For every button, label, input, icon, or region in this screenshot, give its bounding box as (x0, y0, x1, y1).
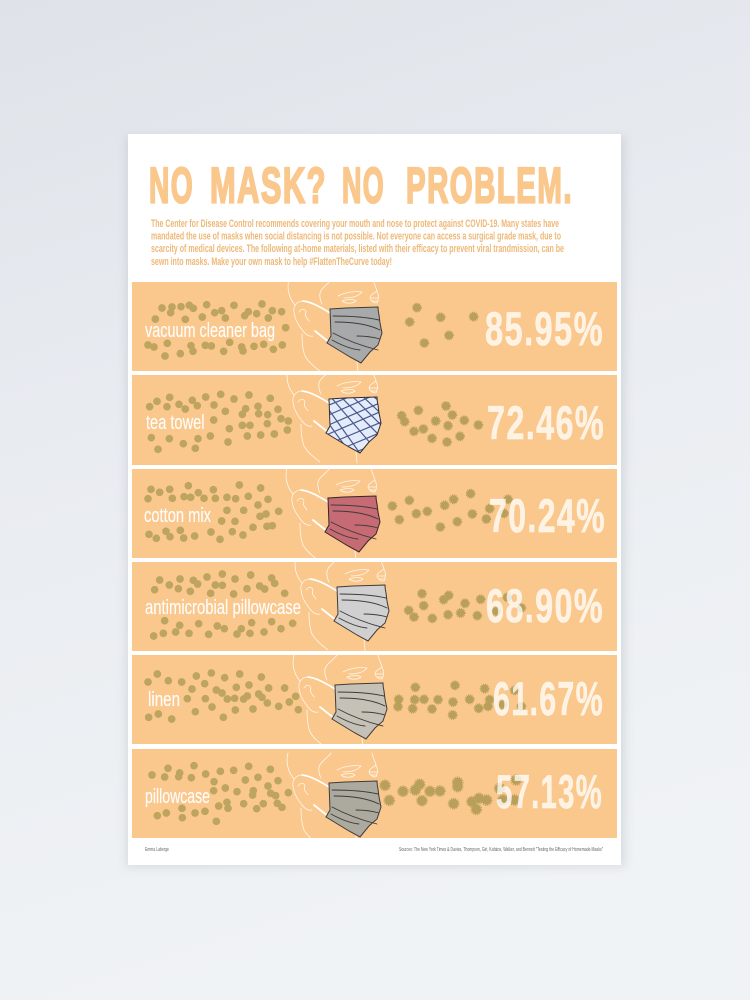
panel: cotton mix (132, 468, 617, 562)
poster shadow (126, 136, 625, 867)
inhaled particles (148, 485, 279, 539)
efficacy value: 85.95% (485, 302, 604, 355)
title: MASK? (210, 158, 327, 214)
inhaled particles (150, 394, 288, 449)
title (149, 158, 573, 214)
material label: linen (148, 689, 180, 711)
panel: vacuum cleaner bag (132, 279, 617, 373)
inhaled particles (152, 766, 288, 821)
material label: tea towel (146, 412, 204, 434)
inhaled particles (154, 574, 293, 636)
panel: tea towel (132, 369, 617, 465)
panel: linen (132, 655, 617, 749)
particles passing through (380, 775, 521, 814)
title: NO (342, 158, 385, 214)
face and linen mask (293, 655, 387, 749)
material label: cotton mix (144, 505, 211, 527)
material label: antimicrobial pillowcase (145, 597, 301, 619)
inhaled particles (148, 304, 286, 356)
efficacy value: 68.90% (486, 579, 604, 632)
panel: pillowcase (132, 749, 617, 847)
inhaled particles (148, 673, 298, 719)
particles passing through (405, 303, 478, 347)
sources: Sources: The New York Times & Davies, Thompson, Giri, Kafatos, Walker, and Bennett "Testing the Efficacy of Homemade Masks" (399, 847, 603, 853)
intro paragraph (151, 218, 564, 268)
material label: pillowcase (145, 786, 210, 808)
particles passing through (397, 402, 483, 446)
face and taupe mask (287, 753, 381, 847)
material label: vacuum cleaner bag (145, 320, 275, 342)
particles passing through (394, 681, 526, 719)
poster sheet (128, 134, 621, 865)
efficacy value: 70.24% (489, 489, 606, 542)
author credit: Emma Laberge (145, 847, 169, 853)
particles passing through (388, 489, 512, 531)
face and light grey mask (295, 557, 389, 651)
face and checked mask (286, 375, 382, 464)
face and red mask (286, 468, 380, 562)
face and grey mask (288, 279, 382, 373)
efficacy value: 61.67% (493, 672, 604, 725)
title: NO (149, 158, 194, 214)
efficacy value: 72.46% (487, 396, 605, 449)
particles passing through (404, 589, 526, 623)
efficacy value: 57.13% (496, 765, 603, 818)
title: PROBLEM. (406, 158, 573, 214)
intro paragraph: sewn into masks. Make your own mask to help #FlattenTheCurve today! (151, 256, 392, 268)
panel: antimicrobial pillowcase (132, 557, 617, 651)
